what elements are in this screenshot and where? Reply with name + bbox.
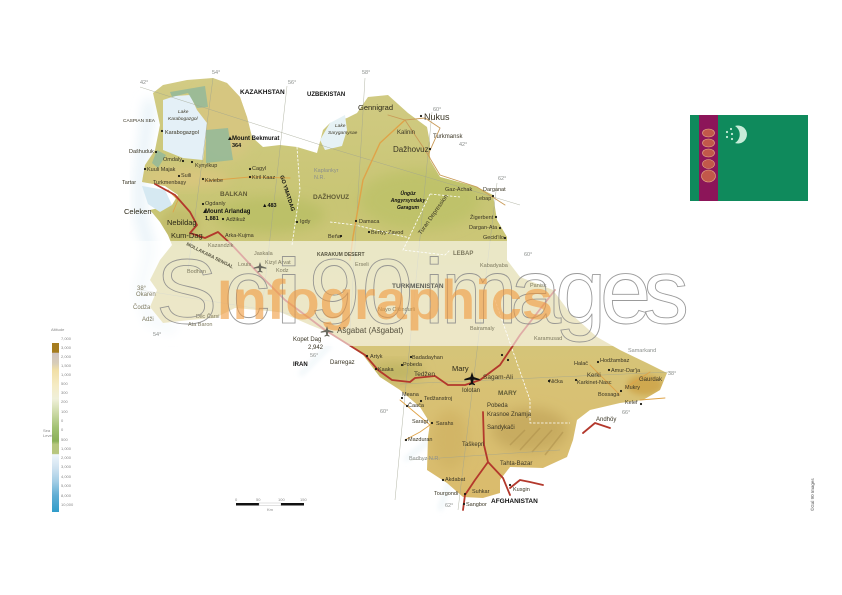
labels: central band: Panisk [530,283,547,289]
watermark: orange word: Infographics [217,268,553,331]
labels: north and west: UZBEKISTAN [307,92,345,98]
labels: north and west: Kiviebe [205,178,223,184]
labels: north and west: 42° [459,142,467,148]
labels: south: Samarkand [628,348,656,354]
label: Ashgabat capital: Ašgabat (Ašgabat) [337,326,404,335]
labels: north and west: Beňa [328,234,342,240]
labels: central band: Adži [142,317,154,323]
labels: north and west: 58° [362,70,370,76]
labels: south: Nička [549,379,564,385]
labels: south: Badhyz N.R. [409,456,440,462]
watermark: outlined logotype: g [555,241,606,343]
labels: north east: Bertyy Zavod [371,230,403,236]
labels: central band: Erseli [355,262,369,268]
labels: north and west: GO YMATDAG [278,175,295,212]
labels: south: Tahta-Bazar [500,461,532,467]
icon: planes at Louis and Ashgabat [254,262,333,337]
labels: north and west: DAŽHOVUZ [313,192,349,201]
elevation legend: 500 [61,381,68,386]
watermark: outlined logotype: a [510,241,562,343]
labels: central band: MOLLAKARA SENGAL [185,241,234,270]
labels: north and west: Kiril Kaaz [252,175,275,181]
watermark: outlined logotype: 9 [309,241,360,343]
labels: north and west: 60° [433,107,441,113]
labels: south: Tourgondi [434,491,458,497]
labels: south: Sagam-Ali [483,374,513,381]
labels: central band: Karamusad [534,336,562,342]
elevation legend: 3,000 [61,345,72,350]
labels: central band: Kopet Dag [293,337,321,343]
labels: north and west: 56° [288,80,296,86]
labels: north and west: N.R. [314,175,325,181]
labels: south: Mary [452,364,469,373]
labels: north east: Darganat [483,187,506,193]
elevation legend: Level [43,433,53,438]
labels: central band: Louis [238,262,251,268]
labels: south: Andhöy [596,417,616,423]
elevation legend: 300 [61,390,68,395]
labels: central band: Jaskala [254,251,274,257]
labels: north east: Garagum [397,205,420,211]
labels: south: Mukry [625,385,640,391]
caspian and neighbouring water tint [140,100,610,510]
labels: north and west: BALKAN [220,191,248,198]
labels: south: MARY [498,390,518,397]
watermark: outlined logotype: m [441,241,518,343]
labels: north and west: 54° [212,70,220,76]
labels: south: Tedžen [414,371,435,378]
labels: north and west: Omdaly [163,157,182,163]
elevation legend: 8,000 [61,493,72,498]
labels: central band: Kabadyaba [480,263,509,269]
elevation legend: 2,000 [61,455,72,460]
labels: north and west: CASPIAN SEA [123,118,156,124]
labels: central band: 54° [153,332,161,338]
labels: south: Kusgin [513,487,530,493]
labels: central band: 38° [137,286,147,292]
labels: south: Akdabat [445,477,466,483]
labels: central band: Dilc Čarsi [196,313,220,320]
watermark: outlined logotype: i [424,241,444,343]
labels: south: Kelef [625,400,638,406]
rivers and canals [168,115,665,440]
labels: north and west: Kynylkup [195,163,217,169]
labels: north east: Turkmansk [433,134,463,140]
labels: south [293,348,676,509]
labels: south: 56° [310,353,318,359]
labels: south: Artyk [370,354,383,360]
labels: north and west: ▲483 [262,203,277,209]
elevation legend: Altitude [51,327,65,332]
labels: north and west: Ogdanly [205,201,226,207]
labels: central band: KARAKUM DESERT [317,252,364,258]
labels: north east: Lebap [476,196,491,202]
labels: south: Pobeda [487,403,508,409]
labels: central band: Bairamaly [470,326,495,332]
labels: north and west: Kuuli Majak [147,167,176,173]
labels: north east: Üngüz [400,190,416,197]
watermark: outlined logotype: c [224,241,270,343]
watermark: outlined logotype: s [643,241,689,343]
scale bar: 0 [235,497,238,502]
labels: south: 62° [445,503,453,509]
labels: north and west: Lake [178,109,189,115]
labels: central band: Ata Baron [188,322,212,328]
watermark: outlined logotype: 0 [362,241,413,343]
labels: central band: LEBAP [453,251,473,257]
scale bar: 150 [300,497,307,502]
elevation legend: 500 [61,437,68,442]
labels: north and west: Adžikuž [226,217,246,223]
labels: south: Sandykači [487,425,515,431]
labels: south: Sarahs [436,421,454,427]
labels: south: Čaača [408,402,425,409]
labels: south: Pobeda [403,362,423,368]
labels: north east: Žigerbent [470,213,494,221]
labels: north and west: Tartar [122,180,136,186]
labels: north and west [122,70,506,240]
watermark: outlined logotype: e [600,241,651,343]
elevation legend: 2,000 [61,354,72,359]
labels: north and west: Arka-Kujma [225,233,255,239]
labels: south: Tedžanstroj [424,396,452,402]
flag crescent and stars [726,126,747,144]
labels: central band: Bodhan [187,269,206,275]
province borders [292,147,570,423]
labels: south: Badadayhan [412,355,443,361]
watermark: outlined logotype: i [276,241,302,343]
scale bar: Km [267,507,274,512]
labels: north and west: 1,881 [205,216,219,222]
labels: central band: Kizyl Arvat [265,260,291,266]
elevation legend: 200 [61,399,68,404]
scale bar: 100 [278,497,285,502]
labels: north and west: Celeken [124,207,152,216]
labels: north and west: Kum-Dag [171,231,203,240]
labels: north and west: Suili [181,173,191,179]
labels: north and west: Turkmenbaşy [153,180,186,186]
labels: central band: TURKMENISTAN [392,283,444,290]
flag of Turkmenistan [690,115,808,201]
labels: central band: Okaren [136,292,156,298]
labels: south: Mazduran [408,437,432,443]
labels: north east [358,103,506,241]
Turkmenbashi bay [142,186,172,212]
scale bar: 50 [256,497,261,502]
elevation legend: 10,000 [61,502,74,507]
labels: north east: Kalinin [397,130,415,136]
labels: south: 38° [668,371,676,377]
scale bar [235,497,307,512]
labels: north and west: Karabogazgol [165,130,199,136]
labels: south: Bossaga [598,392,620,398]
labels: south: Karkinet-Nasc [577,380,612,386]
lake: Sarygamysh [320,115,347,150]
settlement markers [144,115,642,505]
railway [155,184,610,510]
elevation legend: Sea [43,428,51,433]
labels: north and west: Cagyl [252,166,266,172]
labels: north and west: Mount Arlandag [205,209,251,215]
labels: north east: Turan Depression [418,194,450,236]
elevation legend: 1,500 [61,363,72,368]
labels: central band: 60° [524,252,532,258]
labels: north and west: Sarygamysae [328,130,358,136]
labels: north and west: Igdy [300,219,311,225]
labels: north east: Gecid'ilo [483,235,504,241]
labels: north and west: Kaplankyr [314,168,339,174]
graticule [140,78,670,510]
labels: south: Kaaka [378,367,395,373]
labels: central band: Kodz [276,268,289,274]
elevation legend: 0 [61,418,64,423]
labels: central band: Nayo Cikindurli [378,307,415,313]
elevation legend [43,327,74,512]
elevation legend: 1,000 [61,372,72,377]
labels: north east: Angyrsyndaky [390,198,425,204]
labels: north and west: 364 [232,143,242,149]
labels: south: Saragt [412,419,429,425]
elevation legend: 4,000 [61,474,72,479]
labels: north east: Damaca [359,219,380,225]
labels: north and west: KAZAKHSTAN [240,89,285,96]
elevation legend: 5,000 [61,483,72,488]
labels: south: 60° [380,409,388,415]
elevation legend: 1,000 [61,446,72,451]
icon: airport plane at Mary [464,372,480,385]
elevation legend: 100 [61,409,68,414]
labels: south: Suhkar [472,489,490,495]
labels: south: Halač [574,361,588,367]
labels: north east: Dargan-Ata [469,225,498,231]
labels: south: 66° [622,410,630,416]
elevation legend: 7,000 [61,336,72,341]
labels: north and west: Lake [335,123,346,129]
labels: south: Gaurdak [639,377,663,383]
labels: south: Taškepri [462,442,484,448]
flag carpet ornaments [702,129,716,182]
labels: south: Krasnoe Znamja [487,412,532,418]
labels: south: Sangbor [466,502,487,508]
labels: south: IRAN [293,362,308,368]
labels: north east: Dažhovuz [393,145,429,154]
copyright credit: ©Gal 90 Images [809,478,815,511]
watermark band [100,241,700,346]
labels: south: Hodžambaz [600,358,630,364]
labels: south: Kerki [587,373,601,379]
labels: central band: Čodža [133,304,151,311]
labels: north and west: 42° [140,80,148,86]
labels: south: Darregaz [330,360,355,366]
labels: north and west: Mount Bekmurat [232,136,279,142]
labels: north east: Gaz-Achak [445,187,472,193]
watermark: outlined logotype: S [156,241,217,343]
lake: Karabogazgol [152,86,233,168]
labels: south: AFGHANISTAN [491,498,538,505]
labels: north and west: 62° [498,176,506,182]
labels: north east: Nukus [424,112,450,122]
labels: north and west: Karabogazgol [168,116,199,122]
elevation legend: 0 [61,427,64,432]
map: country relief [140,78,667,498]
labels: central band: 2,942 [308,345,324,351]
labels: south: Iolotan [462,388,480,394]
labels: south: Meana [402,392,420,398]
labels: north east: Gennigrad [358,103,393,112]
labels: central band [133,241,562,351]
labels: central band: Kazandzik [208,243,234,249]
elevation legend: 3,000 [61,464,72,469]
labels: north and west: Nebildag [167,218,197,227]
labels: south: Amur-Dar'ja [611,368,641,374]
labels: north and west: Dašhuduk [129,149,154,155]
